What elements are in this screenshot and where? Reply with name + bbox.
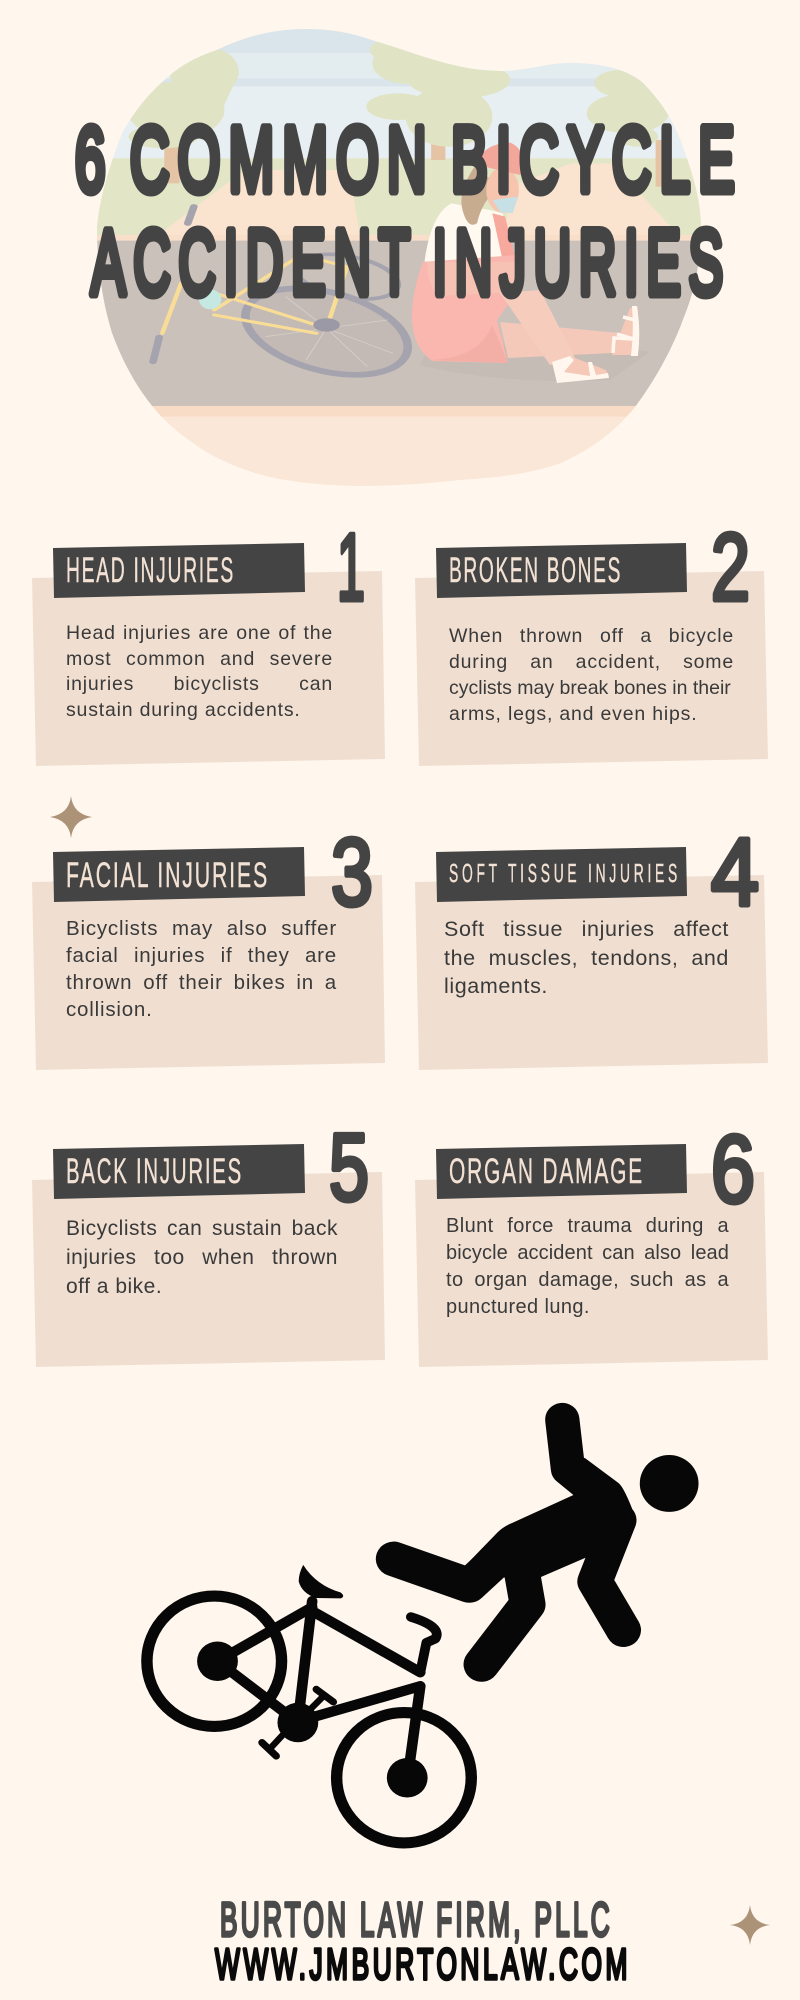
title <box>75 109 743 314</box>
panel: head injuries: 1 <box>337 514 365 621</box>
icon: falling person <box>394 1420 699 1664</box>
text: back injuries: Bicyclists can sustain back <box>66 1217 338 1240</box>
text: facial injuries: collision. <box>66 998 153 1021</box>
text: head injuries: Head injuries are one of the <box>66 622 333 644</box>
icon: bicycle <box>147 1565 471 1843</box>
panel: facial injuries <box>32 819 385 1070</box>
text: broken bones: arms, legs, and even hips. <box>449 703 697 725</box>
panel: soft tissue injuries: 4 <box>711 819 759 926</box>
text: facial injuries: facial injuries if they are <box>66 944 337 967</box>
text: broken bones: during an accident, some <box>449 651 734 673</box>
text: broken bones <box>449 625 734 725</box>
person lower body <box>420 345 650 381</box>
icon: cyclist falling off bicycle <box>141 1402 698 1848</box>
text: head injuries: sustain during accidents. <box>66 699 301 721</box>
panel: broken bones <box>415 514 768 766</box>
text: facial injuries <box>66 917 337 1021</box>
text: head injuries: most common and severe <box>66 648 333 670</box>
text: soft tissue injuries: Soft tissue injuries affect <box>444 917 729 941</box>
text: broken bones: cyclists may break bones in their <box>449 677 731 699</box>
panel: back injuries <box>32 1114 385 1367</box>
text: facial injuries: thrown off their bikes in a <box>66 971 337 994</box>
panel: organ damage: ORGAN DAMAGE <box>449 1152 644 1191</box>
text: organ damage <box>446 1215 729 1318</box>
panel: organ damage <box>415 1116 768 1367</box>
text: head injuries <box>66 622 333 721</box>
text: organ damage: bicycle accident can also lead <box>446 1242 729 1264</box>
bicycle <box>292 252 402 301</box>
text: organ damage: Blunt force trauma during a <box>446 1215 729 1237</box>
panel: facial injuries: 3 <box>331 819 373 926</box>
text: back injuries <box>66 1217 338 1298</box>
panel: back injuries: 5 <box>329 1114 369 1221</box>
panel: head injuries: HEAD INJURIES <box>66 551 235 590</box>
panel: head injuries <box>32 514 385 766</box>
text: head injuries: injuries bicyclists can <box>66 673 333 695</box>
icon: right sparkle star <box>730 1906 770 1945</box>
text: back injuries: off a bike. <box>66 1275 162 1298</box>
text: soft tissue injuries <box>444 917 729 998</box>
text: organ damage: punctured lung. <box>446 1296 590 1318</box>
text: facial injuries: Bicyclists may also suffer <box>66 917 337 940</box>
person upper body <box>424 204 504 262</box>
text: organ damage: to organ damage, such as a <box>446 1269 729 1291</box>
icon: left sparkle star <box>50 796 92 838</box>
panel: back injuries: BACK INJURIES <box>66 1152 243 1191</box>
trunks <box>164 147 180 184</box>
panel: soft tissue injuries <box>415 819 768 1070</box>
text: soft tissue injuries: the muscles, tendons, and <box>444 946 729 970</box>
panel: broken bones: 2 <box>711 514 750 621</box>
panel: broken bones: BROKEN BONES <box>449 551 622 590</box>
illustration: cyclist after accident inside organic blob <box>97 29 701 486</box>
text: back injuries: injuries too when thrown <box>66 1246 338 1269</box>
panel: organ damage: 6 <box>711 1116 755 1223</box>
text: soft tissue injuries: ligaments. <box>444 974 548 998</box>
text: broken bones: When thrown off a bicycle <box>449 625 734 647</box>
panel: facial injuries: FACIAL INJURIES <box>66 856 269 895</box>
tree foliage <box>128 40 681 148</box>
